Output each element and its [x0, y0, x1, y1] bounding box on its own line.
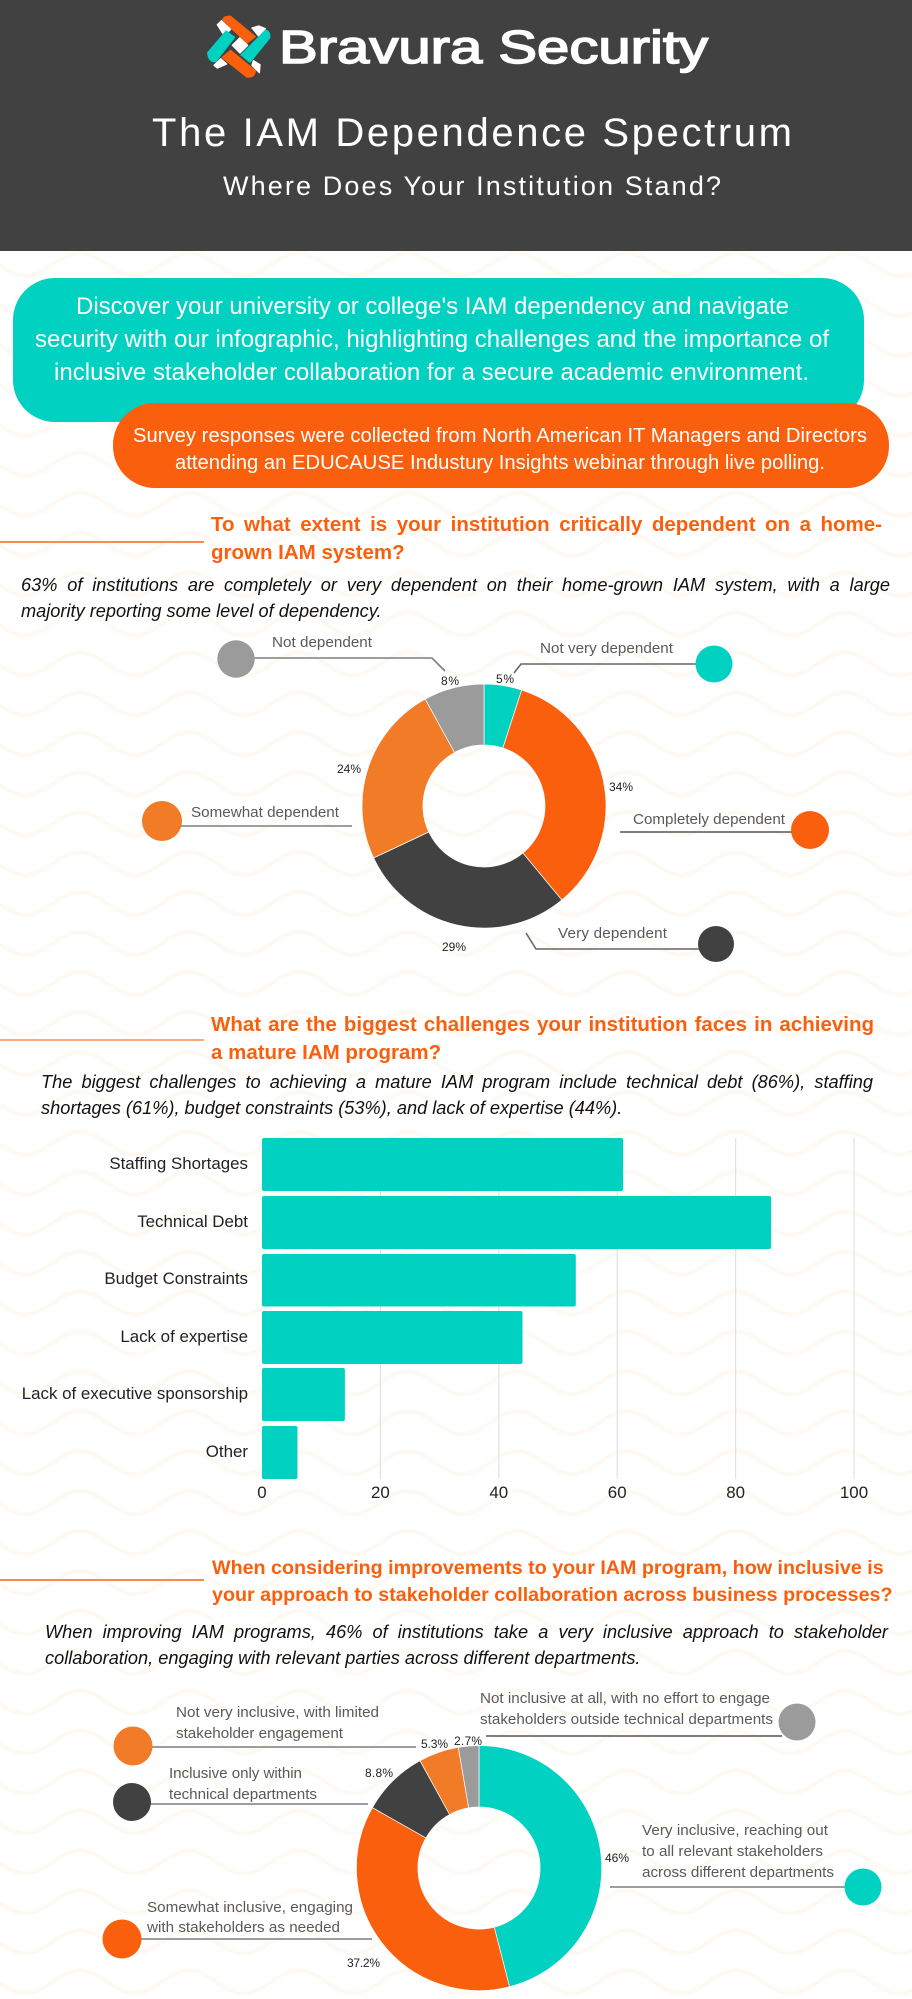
callout: Somewhat dependent: 24%	[337, 762, 361, 776]
bar chart: biggest challenges	[22, 1138, 868, 1502]
callout: Not very inclusive	[114, 1704, 448, 1766]
callout: Somewhat inclusive: 37.2%	[347, 1956, 380, 1970]
callout: Not very dependent: Not very dependent	[540, 640, 674, 657]
donut chart: institutional dependence	[142, 634, 829, 962]
callout: Somewhat dependent	[142, 762, 361, 841]
bar: Technical Debt 86	[137, 1196, 771, 1249]
section 1 heading: To what extent is your institution critically dependent on a home-	[211, 513, 882, 536]
section 3 heading	[212, 1557, 893, 1606]
slice: Completely dependent 34%	[503, 690, 606, 900]
x axis labels: 40	[489, 1483, 508, 1502]
section 2 summary text: shortages (61%), budget constraints (53%), and lack of expertise (44%).	[41, 1098, 622, 1118]
donut chart: stakeholder inclusiveness	[102, 1690, 882, 1991]
bar: Lack of executive sponsorship 14	[22, 1368, 345, 1421]
section 1 rule	[0, 541, 204, 543]
slice: Inclusive only within technical departments 8.8%	[372, 1761, 450, 1838]
callout: Somewhat inclusive	[102, 1899, 380, 1970]
callout: Somewhat inclusive: Somewhat inclusive, engaging	[147, 1899, 353, 1916]
section 3 rule	[0, 1579, 204, 1581]
slice: Not dependent 8%	[425, 684, 484, 752]
callout: Not very dependent: 5%	[496, 672, 514, 686]
section 3 heading: When considering improvements to your IAM program, how inclusive is	[212, 1557, 884, 1579]
callout: Very inclusive: 46%	[605, 1851, 629, 1865]
header banner	[0, 0, 912, 251]
x axis labels	[257, 1483, 868, 1502]
callout: Completely dependent: 34%	[609, 780, 633, 794]
callout: Very dependent	[442, 925, 734, 962]
panel: survey note orange callout	[113, 403, 889, 488]
slice: Very inclusive 46%	[479, 1745, 602, 1987]
callout: Not inclusive at all	[454, 1690, 816, 1748]
slice: Not inclusive at all 2.7%	[458, 1746, 479, 1808]
bar: Lack of expertise 44: Lack of expertise	[120, 1327, 248, 1346]
brand name: Bravura Security	[279, 21, 708, 73]
panel: survey note orange callout: attending an EDUCAUSE Industury Insights webinar through live polling.	[175, 452, 825, 474]
panel: intro teal callout: security with our infographic, highlighting challenges and the importance of	[35, 326, 829, 353]
x axis labels: 100	[840, 1483, 868, 1502]
slice: Very dependent 29%	[374, 832, 562, 928]
section 1 heading: grown IAM system?	[211, 541, 405, 564]
subtitle: Where Does Your Institution Stand?	[223, 171, 721, 201]
x axis labels: 0	[257, 1483, 267, 1502]
icon: Bravura Security logo	[207, 16, 270, 77]
x axis labels: 60	[608, 1483, 627, 1502]
callout: Inclusive only within technical departments	[113, 1765, 393, 1821]
section 1 summary text: majority reporting some level of dependency.	[21, 601, 382, 621]
section 2 summary text	[41, 1072, 873, 1118]
section 3 summary text: When improving IAM programs, 46% of institutions take a very inclusive approach to stakeholder	[45, 1622, 888, 1642]
callout: Inclusive only within technical departments: Inclusive only within	[169, 1765, 302, 1782]
callout: Not very dependent	[496, 640, 732, 686]
callout: Not inclusive at all: 2.7%	[454, 1734, 482, 1748]
callout: Not very inclusive: stakeholder engagement	[176, 1725, 344, 1742]
callout: Very dependent: 29%	[442, 940, 466, 954]
bar: Technical Debt 86: Technical Debt	[137, 1212, 248, 1231]
callout: Completely dependent: Completely dependent	[633, 811, 786, 828]
callout: Not very inclusive: Not very inclusive, with limited	[176, 1704, 379, 1721]
callout: Inclusive only within technical departments: technical departments	[169, 1786, 317, 1803]
bar: Lack of executive sponsorship 14: Lack of executive sponsorship	[22, 1384, 248, 1403]
panel: intro teal callout: inclusive stakeholder collaboration for a secure academic environment.	[54, 359, 809, 386]
slice: Not very dependent 5%	[484, 684, 522, 748]
bar: Lack of expertise 44	[120, 1311, 522, 1364]
bar: Staffing Shortages 61	[109, 1138, 623, 1191]
slice: Somewhat dependent 24%	[362, 699, 455, 858]
section 1 heading	[211, 513, 882, 564]
section 2 heading	[211, 1013, 874, 1064]
callout: Not dependent: 8%	[441, 674, 459, 688]
slice: Not very inclusive 5.3%	[420, 1747, 469, 1814]
section 1 summary text: 63% of institutions are completely or very dependent on their home-grown IAM system, with a large	[21, 575, 890, 595]
callout: Somewhat inclusive: with stakeholders as needed	[146, 1919, 340, 1936]
callout: Not very inclusive: 5.3%	[421, 1737, 448, 1751]
section 1 summary text	[21, 575, 890, 621]
x axis labels: 20	[371, 1483, 390, 1502]
section 2 rule	[0, 1039, 204, 1041]
section 2 heading: What are the biggest challenges your institution faces in achieving	[211, 1013, 874, 1036]
callout: Not inclusive at all: stakeholders outside technical departments	[480, 1711, 773, 1728]
bar: Staffing Shortages 61: Staffing Shortages	[109, 1154, 248, 1173]
callout: Somewhat dependent: Somewhat dependent	[191, 804, 340, 821]
callout: Not inclusive at all: Not inclusive at all, with no effort to engage	[480, 1690, 770, 1707]
panel: survey note orange callout: Survey responses were collected from North American IT Managers and Directors	[133, 425, 867, 447]
section 3 summary text: collaboration, engaging with relevant parties across different departments.	[45, 1648, 640, 1668]
callout: Very dependent: Very dependent	[558, 925, 668, 942]
section 2 heading: a mature IAM program?	[211, 1041, 441, 1064]
section 3 summary text	[45, 1622, 888, 1668]
callout: Completely dependent	[609, 780, 829, 849]
callout: Very inclusive	[605, 1822, 882, 1906]
x axis labels: 80	[726, 1483, 745, 1502]
callout: Very inclusive: to all relevant stakeholders	[642, 1843, 823, 1860]
callout: Inclusive only within technical departments: 8.8%	[365, 1766, 393, 1780]
bar: Budget Constraints 53: Budget Constraints	[104, 1269, 248, 1288]
section 2 summary text: The biggest challenges to achieving a mature IAM program include technical debt (86%), staffing	[41, 1072, 873, 1092]
panel: intro teal callout	[13, 278, 864, 422]
bar: Budget Constraints 53	[104, 1254, 576, 1306]
panel: intro teal callout: Discover your university or college's IAM dependency and navigate	[76, 293, 789, 320]
callout: Very inclusive: across different departments	[642, 1864, 834, 1881]
main title: The IAM Dependence Spectrum	[152, 111, 792, 155]
callout: Very inclusive: Very inclusive, reaching out	[642, 1822, 829, 1839]
slice: Somewhat inclusive 37.2%	[356, 1808, 510, 1991]
callout: Not dependent	[217, 634, 459, 688]
bar: Other 6	[206, 1426, 298, 1479]
section 3 heading: your approach to stakeholder collaboration across business processes?	[212, 1584, 893, 1606]
bar: Other 6: Other	[206, 1442, 248, 1461]
callout: Not dependent: Not dependent	[272, 634, 373, 651]
